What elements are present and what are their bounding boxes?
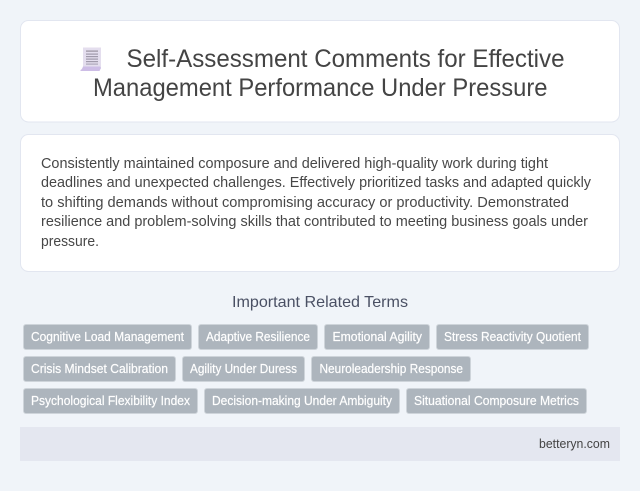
tag: Stress Reactivity Quotient	[436, 324, 588, 350]
tag: Situational Composure Metrics: Situational Composure Metrics	[414, 394, 579, 408]
tag: Crisis Mindset Calibration: Crisis Mindset Calibration	[31, 362, 168, 376]
footer bar	[20, 427, 620, 461]
tag: Adaptive Resilience	[198, 324, 318, 350]
tag: Adaptive Resilience: Adaptive Resilience	[206, 330, 310, 344]
panel: summary text	[20, 134, 620, 272]
tag group: related terms	[24, 324, 588, 414]
text block: self-assessment comment: resilience and problem-solving skills that contributed to meeting business goals under	[41, 214, 588, 230]
text block: self-assessment comment: deadlines and unexpected challenges. Effectively prioritized tasks and adapted quickly	[41, 175, 592, 191]
text block: self-assessment comment: Consistently maintained composure and delivered high-quality work during tight	[41, 156, 548, 172]
tag: Emotional Agility	[324, 324, 430, 350]
title	[93, 45, 564, 102]
tag: Decision-making Under Ambiguity	[204, 388, 400, 414]
icon: document scroll	[80, 48, 101, 71]
tag: Cognitive Load Management: Cognitive Load Management	[31, 330, 185, 344]
tag: Psychological Flexibility Index	[24, 388, 198, 414]
footer source text: betteryn.com	[539, 437, 610, 451]
tag: Agility Under Duress	[182, 356, 304, 382]
text block: self-assessment comment: to shifting demands without compromising accuracy or productivity. Demonstrated	[41, 195, 569, 211]
text block: self-assessment comment: pressure.	[41, 234, 99, 250]
title: Management Performance Under Pressure	[93, 74, 548, 102]
title: Self-Assessment Comments for Effective	[126, 45, 564, 73]
tag: Decision-making Under Ambiguity: Decision-making Under Ambiguity	[212, 394, 393, 408]
tag: Stress Reactivity Quotient: Stress Reactivity Quotient	[444, 330, 581, 344]
tag: Cognitive Load Management	[24, 324, 192, 350]
tag: Agility Under Duress: Agility Under Duress	[190, 362, 297, 376]
text block: self-assessment comment	[41, 156, 592, 250]
tag: Psychological Flexibility Index: Psychological Flexibility Index	[31, 394, 191, 408]
tag: Neuroleadership Response: Neuroleadership Response	[320, 362, 463, 376]
tag: Emotional Agility: Emotional Agility	[332, 330, 423, 344]
tag: Neuroleadership Response	[312, 356, 470, 382]
panel: title card	[20, 20, 620, 122]
tag: Crisis Mindset Calibration	[24, 356, 176, 382]
tag: Situational Composure Metrics	[406, 388, 586, 414]
heading: important related terms: Important Related Terms	[232, 294, 408, 311]
